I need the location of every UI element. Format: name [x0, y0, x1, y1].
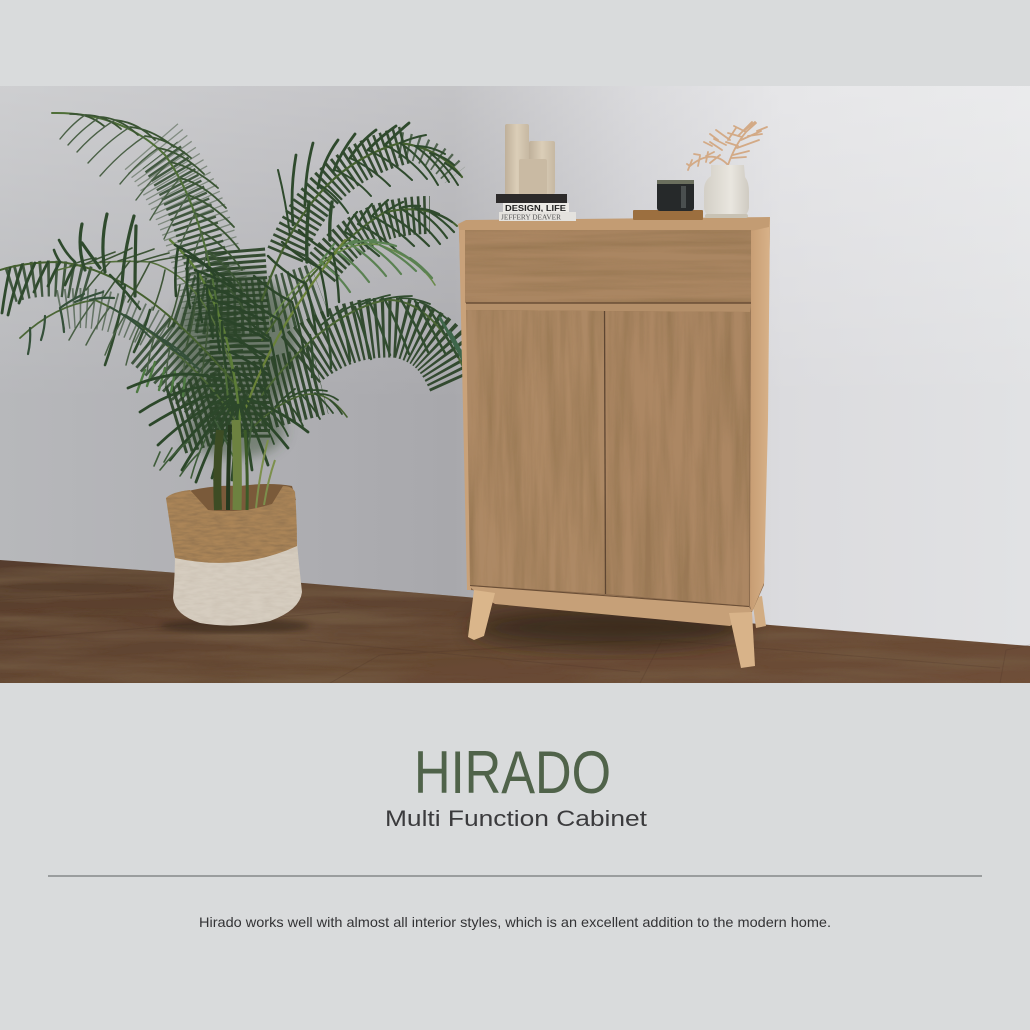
frond: centre dense right [234, 230, 345, 410]
plant stems [217, 420, 275, 510]
wooden floor [0, 560, 1030, 683]
white book: design life: DESIGN, LIFE [505, 203, 566, 213]
frond: far left [0, 214, 240, 390]
basket white lower band [173, 543, 302, 626]
drawer rail [466, 303, 751, 312]
tall candle [505, 124, 529, 195]
back candle [529, 141, 555, 194]
panel: product photo [0, 86, 1030, 683]
left door [466, 310, 605, 594]
front left leg [468, 590, 495, 640]
foliage mass [173, 270, 297, 458]
icon: palm plant [0, 113, 474, 510]
frond: right middle [262, 200, 457, 340]
decor: candles [505, 124, 555, 195]
decor: wooden book [633, 210, 703, 220]
frond: bright centre right [270, 240, 435, 320]
front candle [519, 159, 547, 195]
vase base [705, 214, 748, 218]
drawer [465, 230, 751, 303]
cabinet [458, 217, 770, 668]
front right leg [729, 612, 755, 668]
wall [0, 86, 1030, 598]
cabinet top board [458, 217, 770, 231]
cabinet base rail [469, 586, 752, 626]
frond: low fan [128, 374, 308, 482]
title: HIRADO [414, 739, 611, 806]
frond: bright lower left [137, 362, 185, 396]
frond: lower left [20, 292, 235, 420]
white book: jeffery deaver: JEFFERY DEAVER [501, 214, 561, 222]
decor: book stack [496, 194, 576, 222]
frond: upper left second [58, 248, 238, 390]
cabinet carcass [459, 220, 770, 612]
decor: ceramic vase with dried fern [687, 122, 767, 218]
black book [496, 194, 567, 203]
dried fern [687, 122, 767, 170]
vase body [704, 165, 749, 217]
frond: right lower long [262, 295, 474, 395]
basket interior [190, 484, 296, 512]
decor: dark glass jar [657, 180, 694, 211]
frond: top right arch [262, 123, 462, 300]
icon: woven basket [166, 484, 302, 626]
frond: lower right small [250, 389, 347, 444]
right door [605, 311, 750, 606]
door divider [604, 311, 606, 594]
cabinet back leg [754, 596, 766, 628]
basket jute upper band [166, 486, 297, 563]
cabinet side panel [750, 218, 770, 612]
frond: top left [52, 113, 244, 400]
subtitle: Multi Function Cabinet [385, 806, 648, 831]
frond: centre dense left [170, 240, 270, 420]
dense leaflet texture [10, 145, 458, 440]
divider [48, 875, 982, 877]
cabinet left frame [459, 228, 471, 590]
description text: Hirado works well with almost all interior styles, which is an excellent addition to the modern home. [199, 915, 831, 930]
